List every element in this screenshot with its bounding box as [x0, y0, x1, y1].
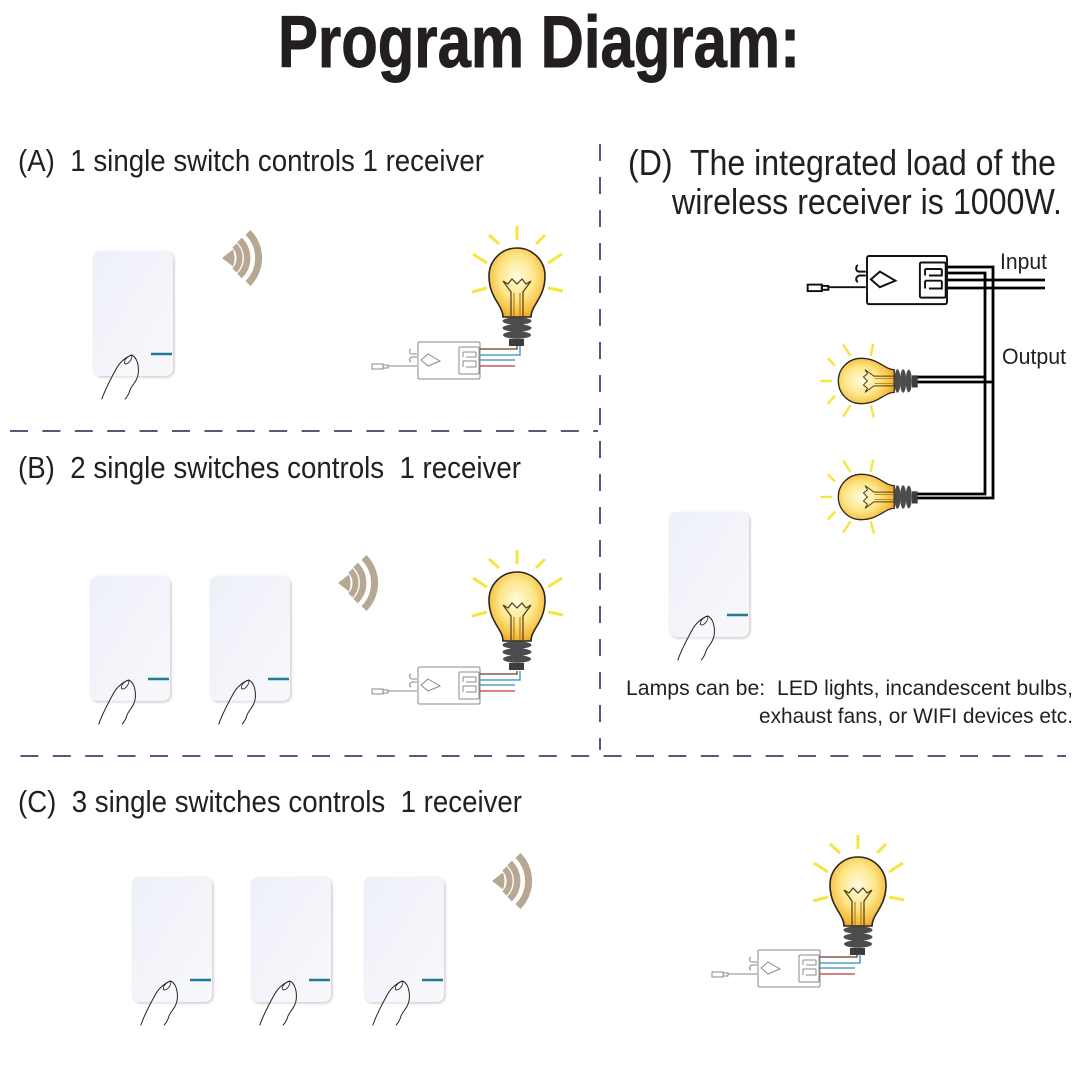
switch C2	[251, 877, 332, 1025]
output label: Output	[1002, 344, 1066, 369]
bulb D1	[820, 344, 918, 417]
light bulb C	[813, 835, 904, 955]
lamps note line 2: exhaust fans, or WIFI devices etc.	[759, 705, 1073, 728]
switch C3	[364, 877, 446, 1025]
switch C1	[132, 877, 214, 1025]
panel B: 2 switches, 1 receiver	[18, 450, 563, 724]
panel D: integrated load	[626, 142, 1073, 728]
wireless signal B	[338, 558, 375, 608]
switch A	[93, 251, 174, 399]
wiring	[917, 267, 1045, 498]
light bulb A	[472, 226, 563, 346]
heading A: (A) 1 single switch controls 1 receiver	[18, 143, 484, 178]
switch B2	[210, 576, 292, 724]
wireless signal C	[492, 856, 529, 906]
receiver B	[372, 667, 520, 704]
dashed dividers	[10, 144, 1066, 756]
switch D	[669, 512, 750, 660]
wireless signal A	[222, 232, 259, 284]
panel C: 3 switches, 1 receiver	[18, 784, 904, 1025]
receiver D	[808, 256, 947, 304]
heading B: (B) 2 single switches controls 1 receiver	[18, 450, 521, 485]
light bulb B	[472, 550, 563, 670]
bulb D2	[820, 460, 918, 533]
title: Program Diagram:	[278, 2, 800, 83]
receiver A	[372, 342, 520, 379]
heading C: (C) 3 single switches controls 1 receiver	[18, 784, 522, 819]
panel A: 1 switch, 1 receiver	[18, 143, 563, 399]
receiver C	[712, 950, 860, 987]
input label: Input	[1000, 249, 1047, 274]
switch B1	[90, 576, 172, 724]
lamps note line 1: Lamps can be: LED lights, incandescent bulbs,	[626, 677, 1073, 700]
